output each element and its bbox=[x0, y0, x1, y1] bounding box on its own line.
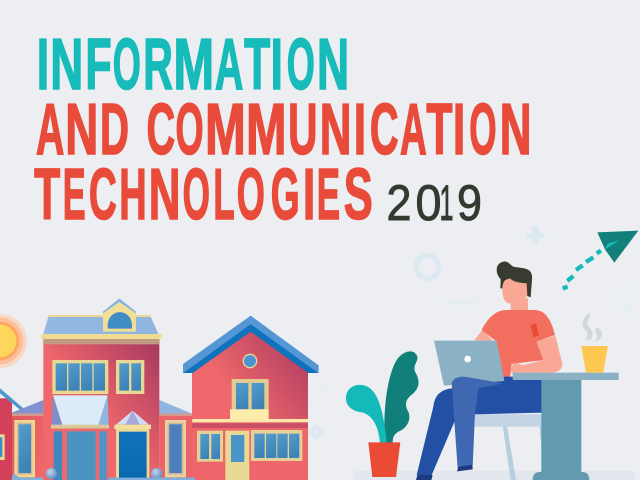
title line: technologies: O bbox=[237, 155, 265, 235]
title line: information: I bbox=[270, 25, 283, 105]
title line: and communication: O bbox=[469, 90, 497, 170]
title line: technologies: O bbox=[183, 155, 210, 235]
cup bbox=[581, 346, 608, 373]
near arm bbox=[510, 336, 562, 373]
small window bbox=[116, 360, 144, 394]
icon: minus bbox=[446, 300, 477, 305]
title line: and communication: D bbox=[100, 90, 129, 170]
icon: ring bbox=[416, 256, 439, 278]
person bbox=[416, 262, 562, 480]
year: 9 bbox=[457, 175, 482, 231]
main door bbox=[67, 431, 96, 480]
cornice bbox=[41, 334, 162, 339]
title line: information: O bbox=[113, 25, 141, 105]
roof bbox=[43, 317, 158, 334]
face bbox=[502, 277, 527, 303]
title line: and communication: N bbox=[500, 90, 532, 170]
entry pediment bbox=[116, 411, 149, 425]
upper window bbox=[232, 379, 269, 411]
house: right wing bbox=[159, 400, 193, 480]
far leg bbox=[417, 388, 457, 475]
house: left wing bbox=[12, 400, 44, 480]
house: far left bbox=[0, 388, 26, 480]
title line: and communication: A bbox=[400, 90, 427, 170]
arrow: dashed flight path bbox=[563, 251, 601, 288]
house: right building bbox=[183, 316, 319, 480]
title line: information: T bbox=[244, 25, 270, 105]
icon: diamond bbox=[308, 424, 324, 440]
shoe near bbox=[457, 465, 473, 471]
porch bbox=[53, 395, 108, 425]
light leaf bbox=[346, 385, 387, 443]
icon: partial ring bbox=[623, 283, 638, 315]
title line: information: O bbox=[287, 25, 315, 105]
dormer bbox=[103, 302, 136, 332]
laptop bbox=[434, 341, 504, 386]
house: main building bbox=[41, 298, 162, 480]
left window bbox=[197, 431, 223, 462]
year: 1 bbox=[440, 175, 454, 231]
title line: and communication: O bbox=[176, 90, 204, 170]
near leg bbox=[452, 377, 503, 468]
globes bbox=[46, 468, 57, 479]
title line: and communication: T bbox=[426, 90, 453, 170]
plant bbox=[346, 351, 419, 477]
title line: and communication: M bbox=[246, 90, 286, 170]
shirt bbox=[482, 310, 555, 378]
year: 2 bbox=[386, 175, 412, 231]
title line: and communication: I bbox=[453, 90, 465, 170]
year: 0 bbox=[416, 175, 442, 231]
pants seat bbox=[473, 377, 543, 414]
title line: technologies: I bbox=[303, 155, 315, 235]
chair bbox=[475, 414, 544, 480]
hair bbox=[497, 262, 532, 297]
title line: technologies: N bbox=[149, 155, 180, 235]
shoe far bbox=[416, 475, 433, 480]
title line: technologies: E bbox=[317, 155, 340, 235]
title line: and communication: U bbox=[288, 90, 317, 170]
dash bbox=[314, 385, 330, 390]
illustration: person at table bbox=[346, 231, 638, 480]
title line: technologies: T bbox=[34, 155, 60, 235]
dormer window bbox=[108, 312, 132, 329]
icon: plus bbox=[526, 226, 545, 245]
title line: information: M bbox=[173, 25, 214, 105]
entry door bbox=[116, 429, 149, 480]
big window bbox=[52, 360, 108, 394]
title line: information: R bbox=[143, 25, 173, 105]
right window bbox=[251, 430, 302, 461]
title line: technologies: C bbox=[89, 155, 117, 235]
decorative shapes bbox=[416, 226, 638, 315]
floor bbox=[353, 471, 635, 480]
band bbox=[192, 419, 308, 422]
wall bbox=[43, 339, 159, 480]
title line: information: N bbox=[317, 25, 349, 105]
ground strip bbox=[11, 473, 195, 480]
icon: paper plane bbox=[597, 231, 638, 263]
round window bbox=[243, 354, 257, 368]
title line: and communication: I bbox=[354, 90, 366, 170]
title line: technologies: S bbox=[344, 155, 373, 235]
lower wall bbox=[192, 423, 308, 480]
title line: technologies: L bbox=[213, 155, 235, 235]
icon: sun bbox=[0, 314, 27, 368]
title line: and communication: M bbox=[205, 90, 246, 170]
door bbox=[225, 431, 249, 480]
title line: information: A bbox=[215, 25, 243, 105]
title line: and communication: N bbox=[65, 90, 98, 170]
neck bbox=[511, 298, 528, 313]
title line: and communication: C bbox=[146, 90, 175, 170]
title line: and communication: A bbox=[36, 90, 64, 170]
steam bbox=[583, 313, 602, 343]
title line: and communication: N bbox=[320, 90, 352, 170]
title line: technologies: E bbox=[63, 155, 86, 235]
table bbox=[513, 373, 619, 480]
wall bbox=[192, 328, 308, 480]
title line: and communication: C bbox=[370, 90, 399, 170]
roof bbox=[183, 316, 319, 373]
title line: information: I bbox=[37, 25, 49, 105]
title line: technologies: G bbox=[271, 155, 300, 235]
pocket bbox=[530, 323, 539, 337]
title line: information: F bbox=[85, 25, 112, 105]
title line: information: N bbox=[50, 25, 83, 105]
far arm bbox=[474, 329, 493, 341]
dark leaf bbox=[384, 351, 419, 443]
title line: technologies: H bbox=[119, 155, 147, 235]
illustration: houses bbox=[0, 298, 319, 480]
pot bbox=[368, 442, 400, 477]
title bbox=[34, 25, 531, 235]
porch side panes bbox=[54, 431, 62, 480]
